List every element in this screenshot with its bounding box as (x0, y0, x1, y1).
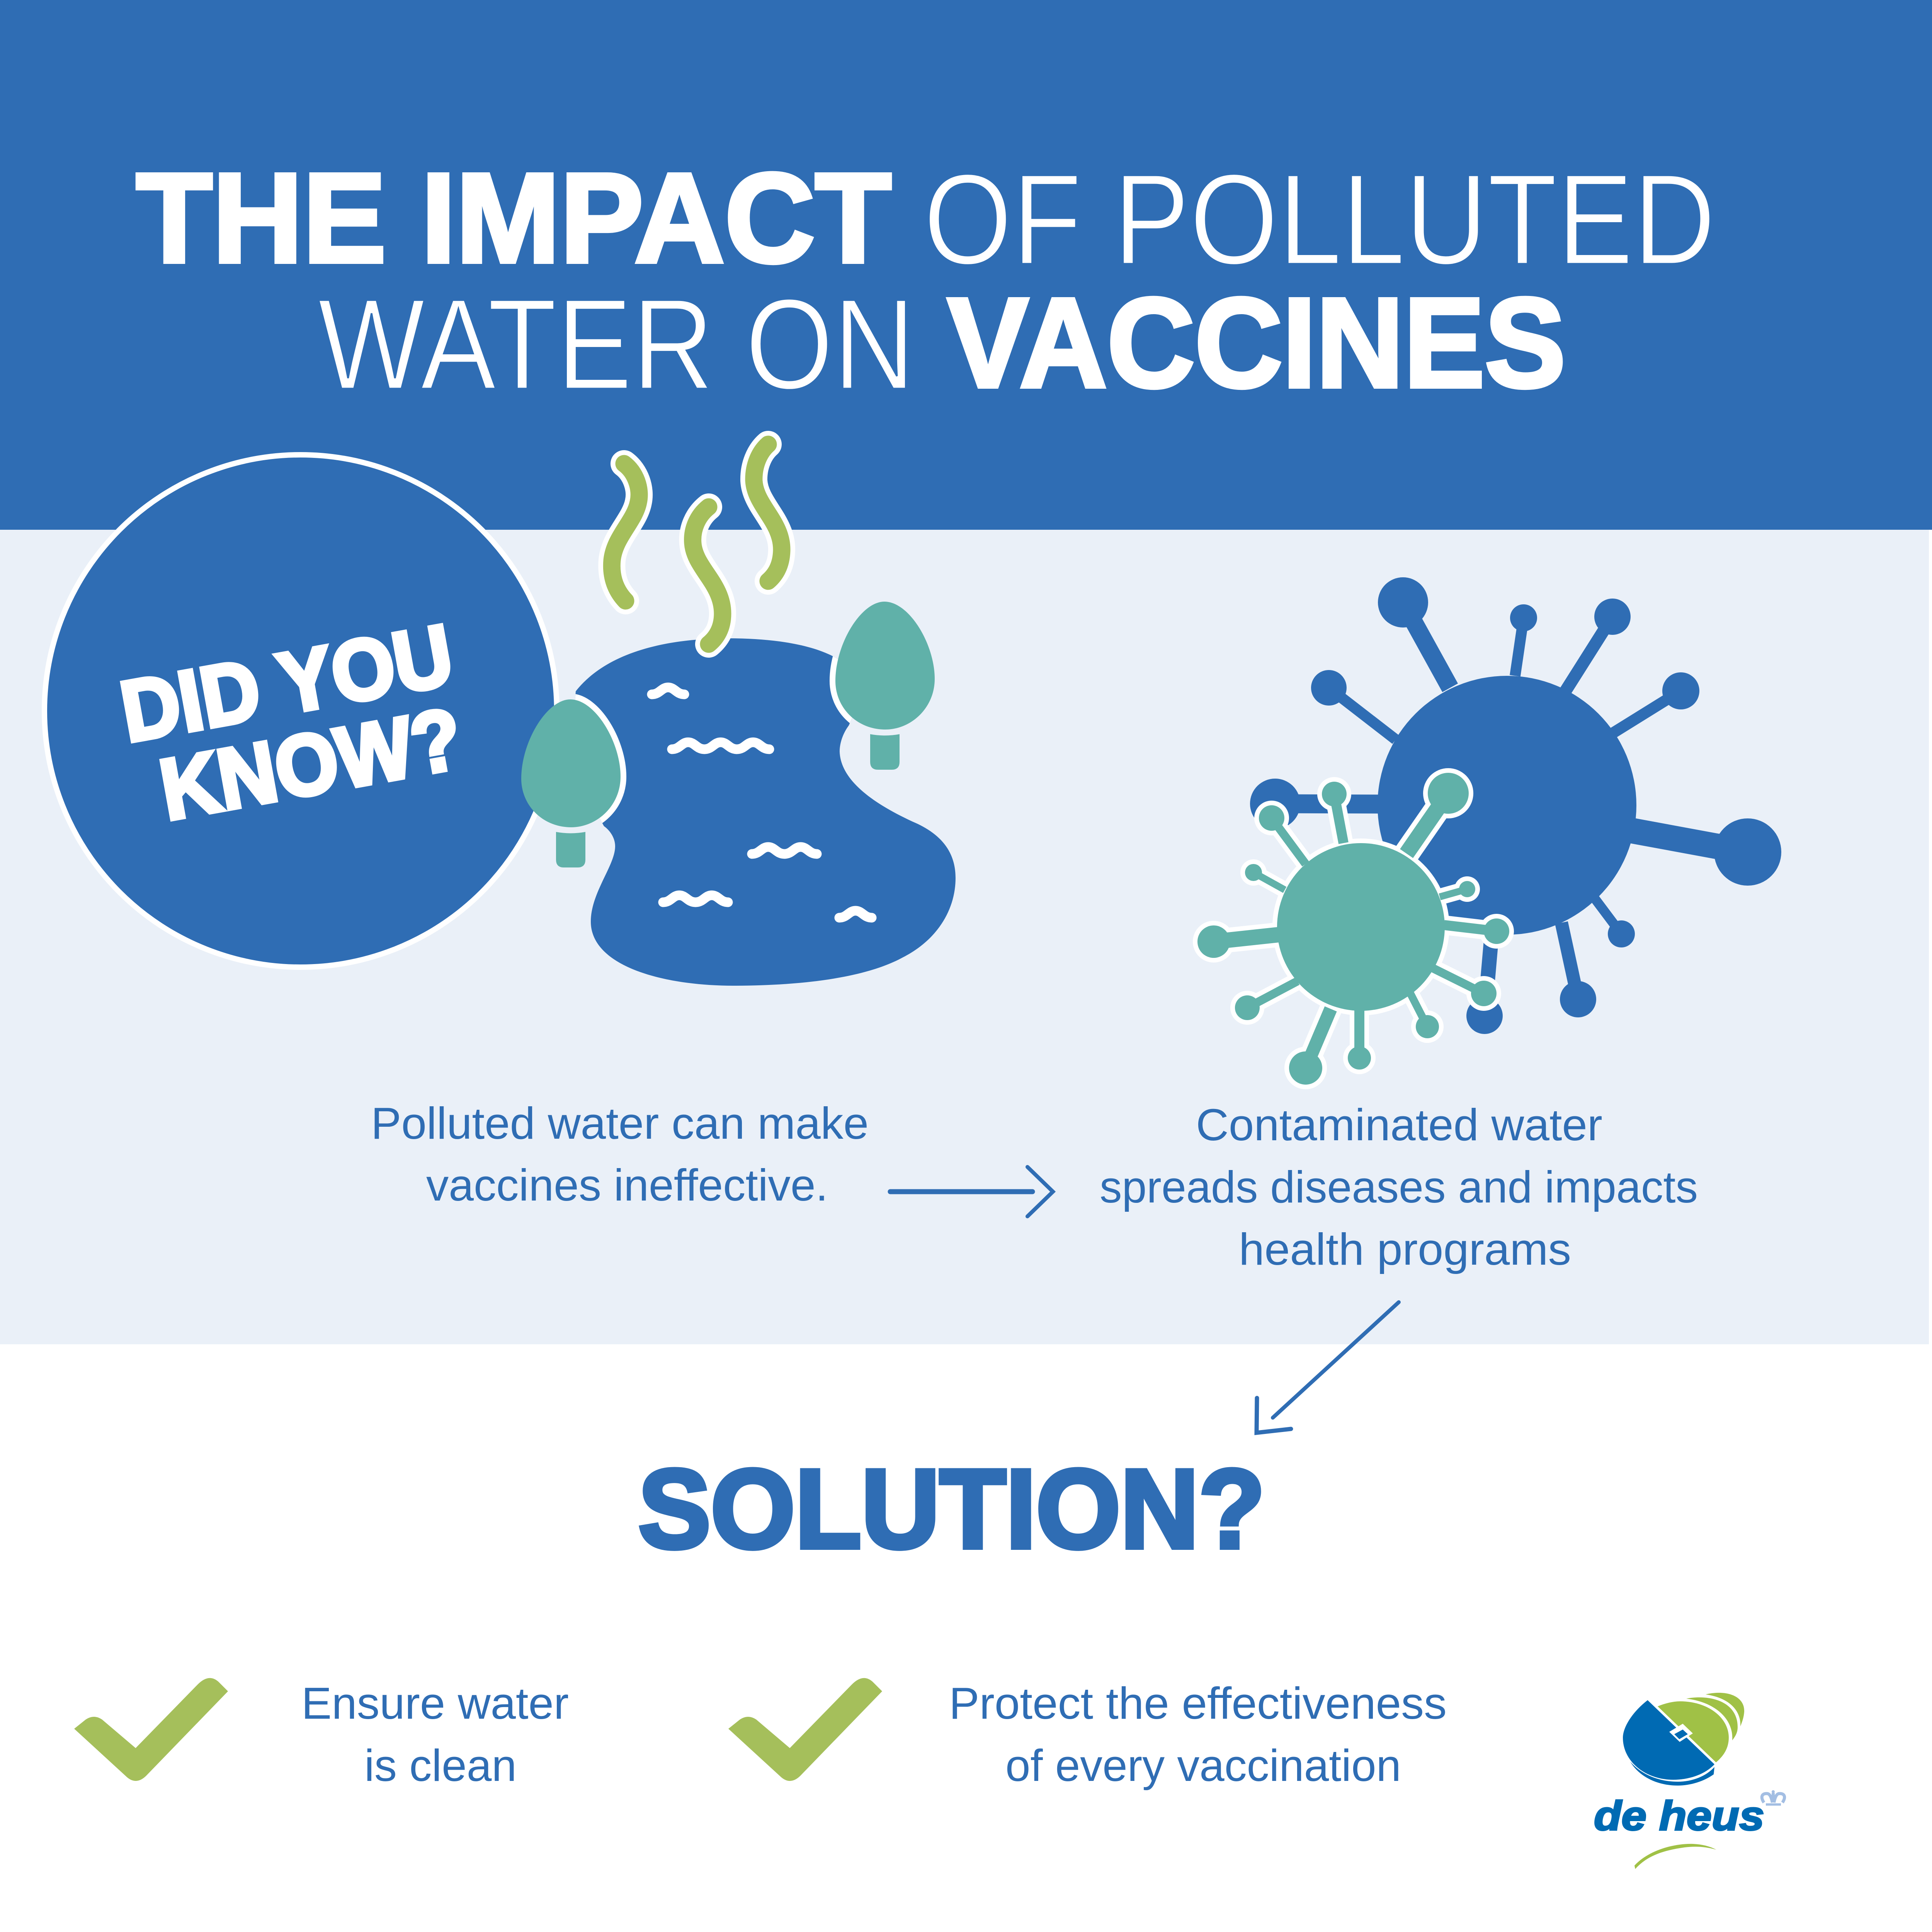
small teal virus (1197, 773, 1509, 1085)
logo emblem (1623, 1693, 1744, 1786)
text block: ensure water: is clean (364, 1740, 517, 1791)
right tree (835, 602, 935, 770)
water ripples (652, 687, 872, 918)
logo wordmark: de heus (1594, 1793, 1764, 1839)
text block: polluted water: Polluted water can make (371, 1098, 869, 1148)
text block: ensure water (301, 1678, 569, 1791)
header band (0, 0, 1932, 530)
text block: contaminated water: spreads diseases and impacts (1100, 1162, 1698, 1212)
heading: solution: SOLUTION? (638, 1446, 1265, 1571)
left tree (521, 699, 621, 867)
title (136, 146, 1716, 416)
arrow: right (890, 1167, 1053, 1216)
arrow: down-left to solution (1257, 1302, 1399, 1433)
title line 1 bold: THE IMPACT (136, 146, 891, 289)
did you know heading: KNOW? (153, 690, 469, 838)
text block: ensure water: Ensure water (301, 1678, 569, 1728)
did you know heading: DID YOU (114, 607, 460, 760)
title line 1 light: OF POLLUTED (923, 147, 1716, 291)
icon: check mark 2 (728, 1678, 882, 1781)
text block: protect effectiveness: Protect the effectiveness (949, 1678, 1447, 1728)
pond water (570, 638, 956, 986)
logo crown (1762, 1790, 1784, 1806)
text block: polluted water: vaccines ineffective. (426, 1160, 828, 1210)
text block: contaminated water (1100, 1100, 1698, 1274)
panel: did you know circle (44, 455, 557, 967)
text block: protect effectiveness: of every vaccination (1005, 1740, 1401, 1791)
title line 2 bold: VACCINES (947, 271, 1566, 414)
illustration: polluted pond (521, 444, 956, 986)
logo: de heus (1594, 1693, 1784, 1869)
light background panel (0, 530, 1929, 1344)
text block: protect effectiveness (949, 1678, 1447, 1791)
icon: check mark 1 (74, 1678, 228, 1781)
large blue virus (1250, 577, 1781, 1034)
text block: contaminated water: Contaminated water (1196, 1100, 1602, 1150)
text block: polluted water (371, 1098, 869, 1210)
did you know heading (114, 607, 469, 838)
text block: contaminated water: health programs (1239, 1224, 1571, 1274)
title line 2 light: WATER ON (318, 272, 915, 416)
small teal virus outline (1193, 768, 1514, 1089)
logo swoosh (1634, 1844, 1716, 1869)
illustration: viruses (1193, 577, 1781, 1089)
foul smell wavy lines (612, 444, 782, 644)
tree outlines on pond (521, 602, 935, 827)
